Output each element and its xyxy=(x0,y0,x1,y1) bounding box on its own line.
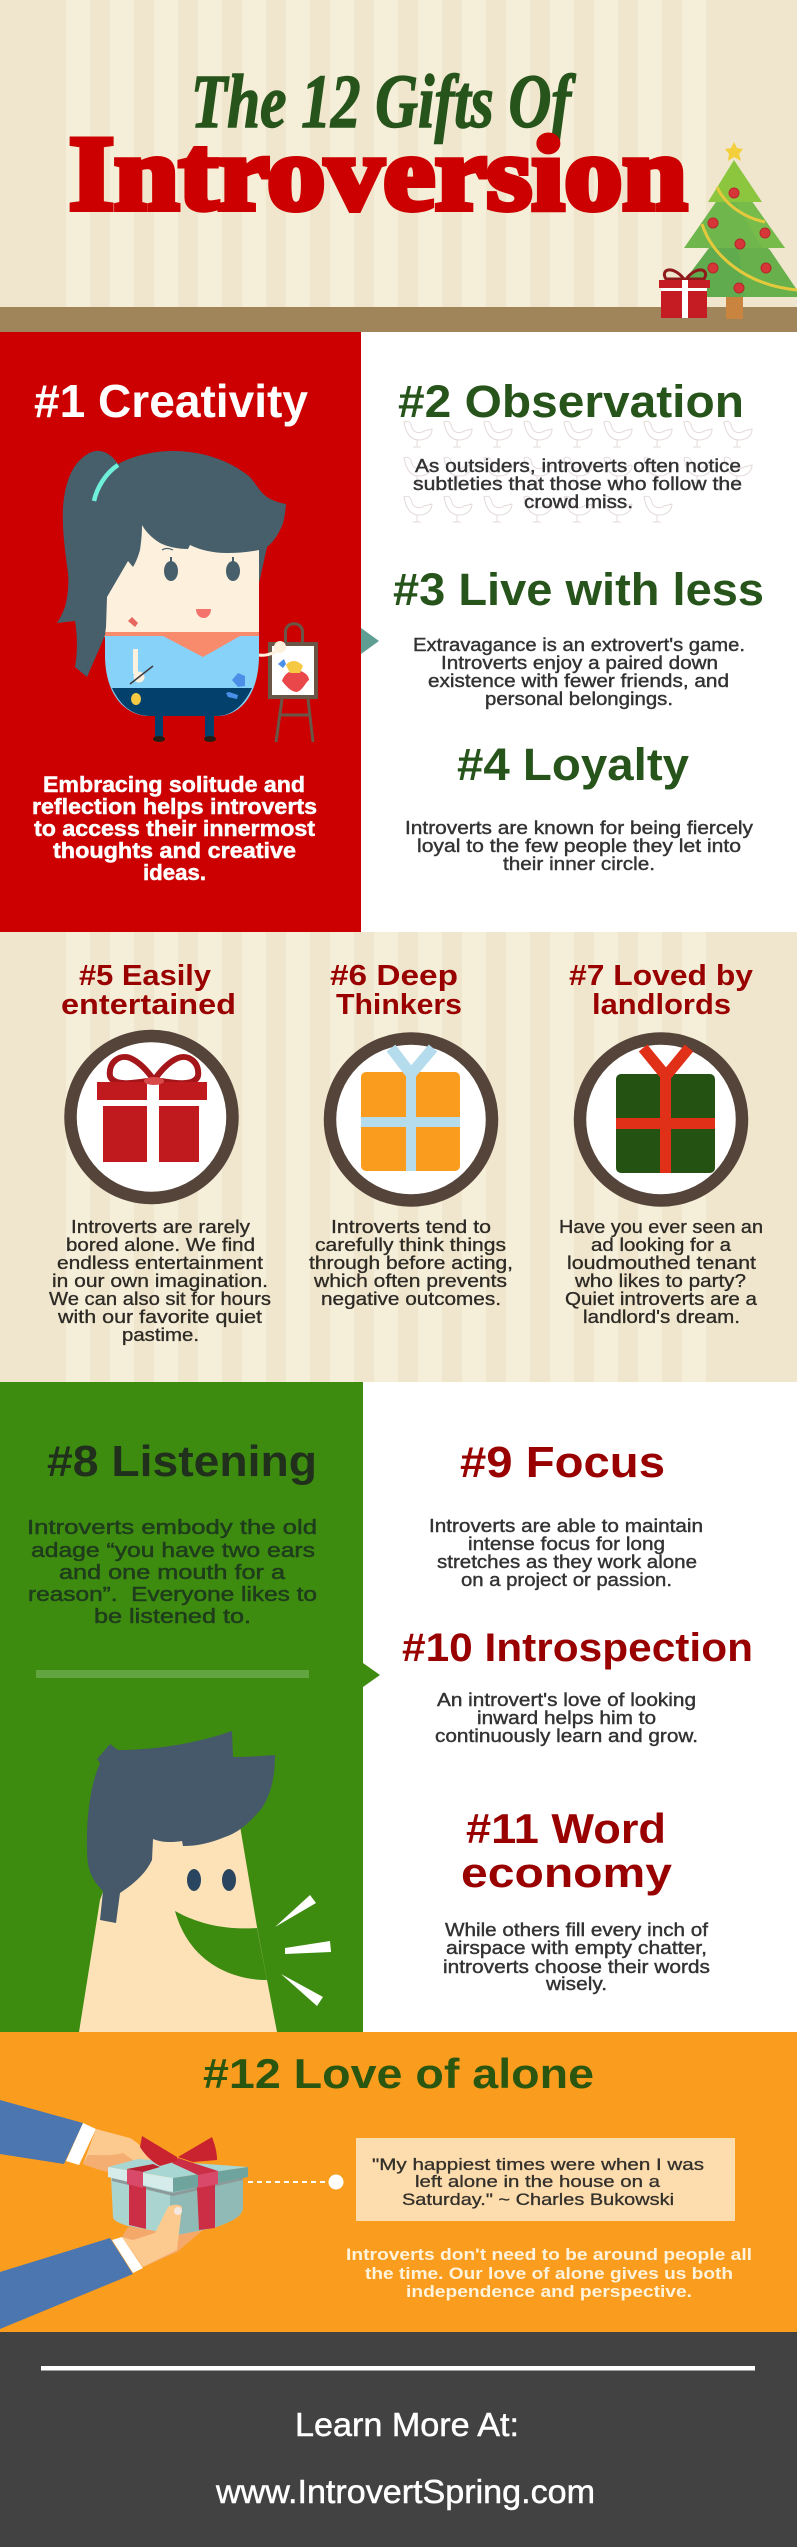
illustration: girl painting xyxy=(57,451,318,742)
heading: #7: landlords xyxy=(592,989,731,1021)
callout: quote xyxy=(356,2138,735,2221)
panel: #8 Listening xyxy=(0,1382,363,2032)
icon: green gift xyxy=(580,1038,742,1200)
text: word economy: wisely. xyxy=(545,1974,607,1994)
text: listening: adage “you have two ears xyxy=(31,1540,315,1562)
text: #7 body: ad looking for a xyxy=(591,1235,732,1255)
text: live with less: Extravagance is an extrovert's game. xyxy=(413,635,745,655)
column: #7 Loved by landlords xyxy=(559,960,763,1327)
divider bar xyxy=(36,1670,309,1678)
heading: #12 Love of alone: #12 Love of alone xyxy=(203,2050,594,2097)
text: observation: subtleties that those who follow the xyxy=(413,474,742,494)
text: love of alone: Introverts don't need to be around people all xyxy=(346,2245,752,2264)
text: love of alone: independence and perspective. xyxy=(406,2282,692,2301)
upper arm xyxy=(0,2100,83,2164)
text: loyalty: loyal to the few people they let into xyxy=(417,836,741,856)
text: Learn More At: Learn More At: xyxy=(295,2406,519,2443)
paintbrush hand xyxy=(133,649,138,674)
text: #7 body: who likes to party? xyxy=(574,1271,746,1291)
text: word economy: airspace with empty chatter, xyxy=(446,1938,707,1958)
heading: #1 Creativity: #1 Creativity xyxy=(34,375,308,427)
text: word economy xyxy=(443,1920,710,1994)
text: listening xyxy=(27,1517,317,1628)
panel: #2 #3 #4 white column xyxy=(361,332,797,932)
heading: #5: entertained xyxy=(61,989,236,1021)
text: creativity description: Embracing solitude and xyxy=(43,772,305,797)
heading: #5 xyxy=(61,960,236,1021)
column: #6 Deep Thinkers xyxy=(309,960,513,1309)
text: introspection xyxy=(435,1690,698,1746)
panel: #9 #10 #11 white column xyxy=(363,1382,797,2032)
heading: #6 xyxy=(330,960,462,1021)
easel xyxy=(276,699,313,742)
footer rule xyxy=(41,2366,755,2370)
icon: small gift xyxy=(659,270,710,318)
text: creativity description xyxy=(32,772,317,885)
text: #7 body: Have you ever seen an xyxy=(559,1217,763,1237)
text: #6 body: negative outcomes. xyxy=(321,1289,501,1309)
text: #5 body: pastime. xyxy=(122,1325,199,1345)
text: creativity description: thoughts and creative xyxy=(53,838,296,863)
text: live with less: personal belongings. xyxy=(485,689,673,709)
text: #6 body: which often prevents xyxy=(313,1271,507,1291)
heading: #3 Live with less: #3 Live with less xyxy=(393,564,764,615)
text: #5 body: with our favorite quiet xyxy=(57,1307,262,1327)
icon: christmas tree xyxy=(672,142,797,319)
gift lid xyxy=(108,2159,248,2178)
text: live with less: Introverts enjoy a paired down xyxy=(441,653,718,673)
callout: quote: left alone in the house on a xyxy=(415,2172,661,2191)
text: #5 body: bored alone. We find xyxy=(66,1235,255,1255)
text: love of alone: the time. Our love of alone gives us both xyxy=(365,2264,733,2283)
text: #6 body xyxy=(309,1217,513,1309)
text: focus: intense focus for long xyxy=(468,1534,665,1554)
text: #7 body xyxy=(559,1217,763,1327)
text: #5 body: in our own imagination. xyxy=(52,1271,268,1291)
arrow: teal pointer xyxy=(361,628,379,654)
heading: #5: #5 Easily xyxy=(79,960,211,992)
text: #6 body: through before acting, xyxy=(309,1253,513,1273)
illustration: talking man xyxy=(79,1731,331,2032)
heading: #11 Word economy: economy xyxy=(461,1849,673,1896)
heading: #8 Listening: #8 Listening xyxy=(47,1437,317,1486)
callout: quote: Saturday." ~ Charles Bukowski xyxy=(402,2190,674,2209)
heading: #7: #7 Loved by xyxy=(569,960,753,992)
text: word economy: While others fill every inch of xyxy=(445,1920,709,1940)
heading: #10 Introspection: #10 Introspection xyxy=(402,1626,753,1670)
text: word economy: introverts choose their words xyxy=(443,1957,710,1977)
text: love of alone xyxy=(346,2245,752,2301)
text: listening: reason”. Everyone likes to xyxy=(28,1584,317,1606)
paint marks xyxy=(128,617,138,627)
connector: dotted line xyxy=(248,2174,344,2190)
column: #5 Easily entertained xyxy=(49,960,271,1345)
title: Introversion: Introversion xyxy=(69,115,687,232)
heading: #2 Observation: #2 Observation xyxy=(398,376,744,427)
lower palm xyxy=(122,2227,203,2267)
hair band xyxy=(94,465,118,501)
floor xyxy=(0,307,797,332)
text: loyalty xyxy=(405,818,753,874)
text: introspection: continuously learn and grow. xyxy=(435,1726,698,1746)
arm xyxy=(259,652,276,655)
panel: header xyxy=(0,0,797,332)
mouth xyxy=(175,1911,267,1980)
bow xyxy=(140,2136,177,2166)
heading: #9 Focus: #9 Focus xyxy=(460,1438,665,1487)
text: observation xyxy=(413,456,742,512)
arrow: green pointer xyxy=(363,1663,380,1687)
text: loyalty: their inner circle. xyxy=(503,854,655,874)
text: #7 body: Quiet introverts are a xyxy=(565,1289,758,1309)
text: observation: As outsiders, introverts often notice xyxy=(415,456,741,476)
title: The 12 Gifts Of: The 12 Gifts Of xyxy=(191,60,576,144)
callout: quote: "My happiest times were when I was xyxy=(372,2155,704,2174)
panel: #12 Love of alone xyxy=(0,2032,797,2332)
heading: #4 Loyalty: #4 Loyalty xyxy=(457,739,689,790)
text: #7 body: landlord's dream. xyxy=(583,1307,740,1327)
text: listening: Introverts embody the old xyxy=(27,1517,317,1539)
text: introspection: An introvert's love of looking xyxy=(437,1690,696,1710)
pattern: hens xyxy=(404,421,752,522)
heading: #11 Word economy: #11 Word xyxy=(466,1805,666,1852)
panel: #5 #6 #7 gifts xyxy=(0,932,797,1382)
icon: orange gift xyxy=(330,1038,492,1200)
text: focus: stretches as they work alone xyxy=(437,1552,697,1572)
text: #6 body: Introverts tend to xyxy=(331,1217,491,1237)
body xyxy=(105,525,259,716)
legs xyxy=(155,716,163,737)
mouth xyxy=(196,609,211,618)
heading: #6: #6 Deep xyxy=(330,960,458,992)
text: focus: on a project or passion. xyxy=(461,1570,672,1590)
heading: #7 xyxy=(569,960,753,1021)
text: #5 body: We can also sit for hours xyxy=(49,1289,271,1309)
text: observation: crowd miss. xyxy=(524,492,633,512)
illustration: hands giving gift xyxy=(0,2100,248,2329)
eyes xyxy=(164,561,178,581)
ribbons xyxy=(129,2183,146,2229)
text: focus: Introverts are able to maintain xyxy=(429,1516,703,1536)
text: #5 body: Introverts are rarely xyxy=(71,1217,250,1237)
text: #7 body: loudmouthed tenant xyxy=(567,1253,756,1273)
text: live with less: existence with fewer friends, and xyxy=(428,671,729,691)
text: #6 body: carefully think things xyxy=(315,1235,506,1255)
lower arm xyxy=(0,2238,133,2329)
text: #5 body: endless entertainment xyxy=(57,1253,263,1273)
panel: #1 Creativity xyxy=(0,332,361,932)
text: focus xyxy=(429,1516,703,1590)
gift body xyxy=(111,2177,243,2235)
text: live with less xyxy=(413,635,745,709)
speech lines xyxy=(275,1895,316,1927)
text: listening: and one mouth for a xyxy=(59,1562,286,1584)
text: creativity description: reflection helps introverts xyxy=(32,794,317,819)
text: creativity description: ideas. xyxy=(143,860,206,885)
text: #5 body xyxy=(49,1217,271,1345)
heading: #6: Thinkers xyxy=(336,989,462,1021)
text: listening: be listened to. xyxy=(94,1606,251,1628)
panel: footer xyxy=(0,2332,797,2547)
icon: red gift xyxy=(70,1036,232,1198)
hair xyxy=(57,451,286,677)
text: loyalty: Introverts are known for being fiercely xyxy=(405,818,753,838)
text: introspection: inward helps him to xyxy=(477,1708,656,1728)
heading: #11 Word economy xyxy=(461,1805,673,1896)
text: creativity description: to access their innermost xyxy=(34,816,316,841)
text: website: www.IntrovertSpring.com xyxy=(215,2473,595,2510)
